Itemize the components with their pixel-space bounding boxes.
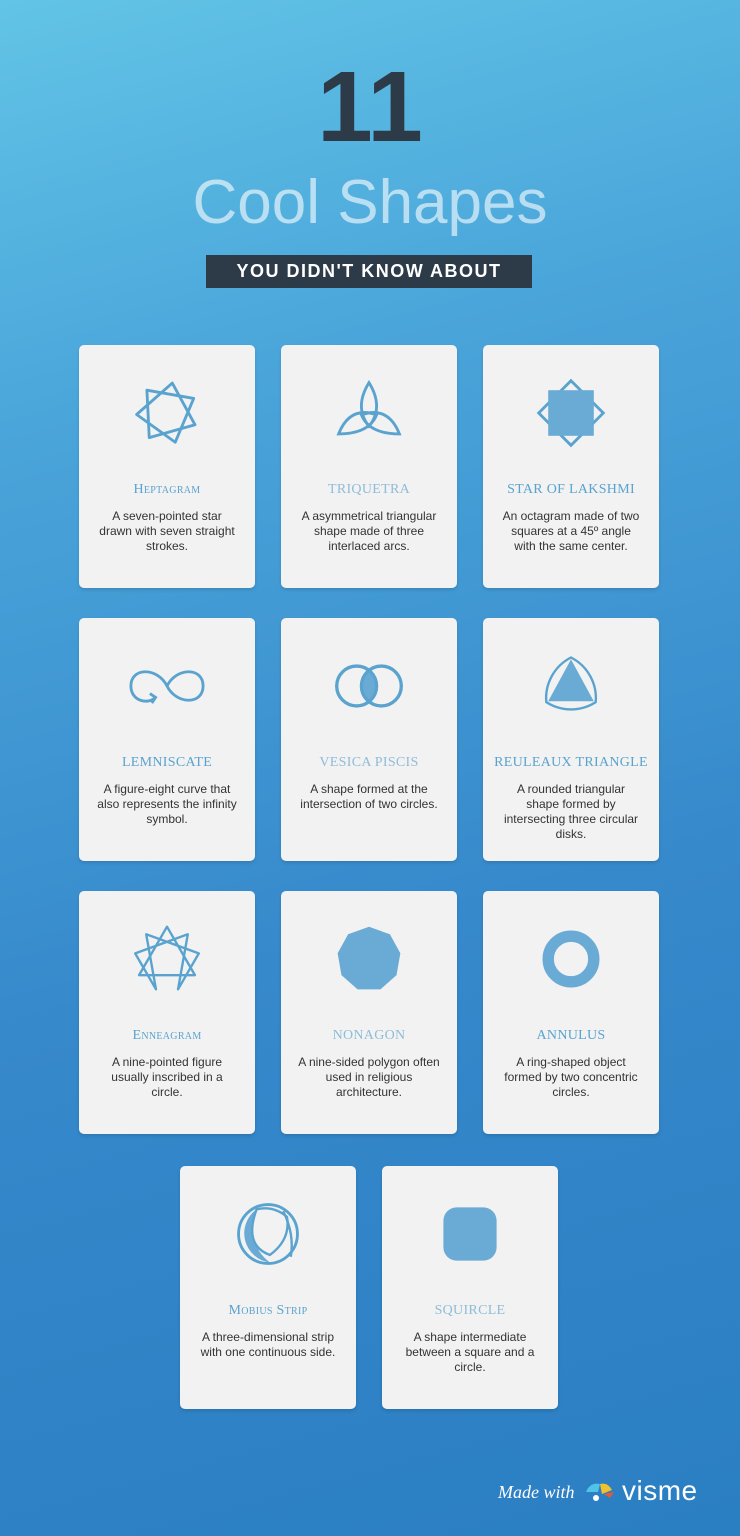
icon: star of lakshmi: [536, 378, 606, 448]
card: enneagram: Enneagram: [132, 1028, 202, 1043]
icon: nonagon: [338, 926, 400, 990]
card: enneagram: [79, 891, 255, 1134]
card: reuleaux: A rounded triangular shape formed by intersecting three circular disks.: [504, 782, 638, 841]
card: heptagram: A seven-pointed star drawn with seven straight strokes.: [99, 509, 235, 553]
icon: enneagram: [134, 926, 200, 990]
card: reuleaux: REULEAUX TRIANGLE: [494, 755, 648, 770]
card: vesica piscis: [281, 618, 457, 861]
card: squircle: SQUIRCLE: [435, 1303, 505, 1318]
card: lemniscate: [79, 618, 255, 861]
card: heptagram: [79, 345, 255, 588]
card: nonagon: A nine-sided polygon often used in religious architecture.: [298, 1055, 440, 1099]
card: squircle: [382, 1166, 558, 1409]
card: vesica piscis: VESICA PISCIS: [319, 755, 419, 770]
subtitle: Cool Shapes: [192, 168, 548, 237]
card: heptagram: Heptagram: [133, 482, 200, 497]
card: vesica piscis: A shape formed at the intersection of two circles.: [300, 782, 438, 811]
banner: [206, 255, 532, 288]
card: annulus: A ring-shaped object formed by two concentric circles.: [504, 1055, 638, 1099]
icon: lemniscate: [130, 670, 204, 704]
icon: heptagram: [135, 382, 196, 444]
footer: made with visme: Made with: [498, 1482, 574, 1502]
title number: 11: [317, 51, 423, 163]
card: lemniscate: LEMNISCATE: [122, 755, 212, 770]
card: triquetra: A asymmetrical triangular shape made of three interlaced arcs.: [302, 509, 436, 553]
card: star of lakshmi: [483, 345, 659, 588]
icon: mobius strip: [237, 1203, 299, 1265]
icon: visme logo: [586, 1484, 614, 1501]
card: squircle: A shape intermediate between a square and a circle.: [406, 1330, 534, 1374]
footer: made with visme: visme: [622, 1475, 698, 1506]
card: lemniscate: A figure-eight curve that also represents the infinity symbol.: [97, 782, 237, 826]
card: mobius strip: A three-dimensional strip with one continuous side.: [201, 1330, 335, 1359]
icon: reuleaux triangle: [544, 656, 598, 711]
icon: vesica piscis: [335, 664, 403, 708]
icon: annulus: [542, 930, 600, 988]
card: nonagon: [281, 891, 457, 1134]
card: nonagon: NONAGON: [333, 1028, 405, 1043]
footer: made with visme: [498, 1475, 698, 1506]
card: enneagram: A nine-pointed figure usually inscribed in a circle.: [111, 1055, 223, 1099]
card: star of lakshmi: STAR OF LAKSHMI: [507, 482, 635, 497]
icon: squircle: [443, 1207, 497, 1261]
card: star of lakshmi: An octagram made of two squares at a 45º angle with the same center.: [503, 509, 639, 553]
card: reuleaux: [483, 618, 659, 861]
card: annulus: ANNULUS: [536, 1028, 606, 1043]
card: triquetra: TRIQUETRA: [328, 482, 410, 497]
card: annulus: [483, 891, 659, 1134]
icon: triquetra: [336, 380, 402, 436]
card: mobius strip: Mobius Strip: [228, 1303, 308, 1318]
card: mobius strip: [180, 1166, 356, 1409]
banner: YOU DIDN'T KNOW ABOUT: [236, 261, 502, 281]
card: triquetra: [281, 345, 457, 588]
